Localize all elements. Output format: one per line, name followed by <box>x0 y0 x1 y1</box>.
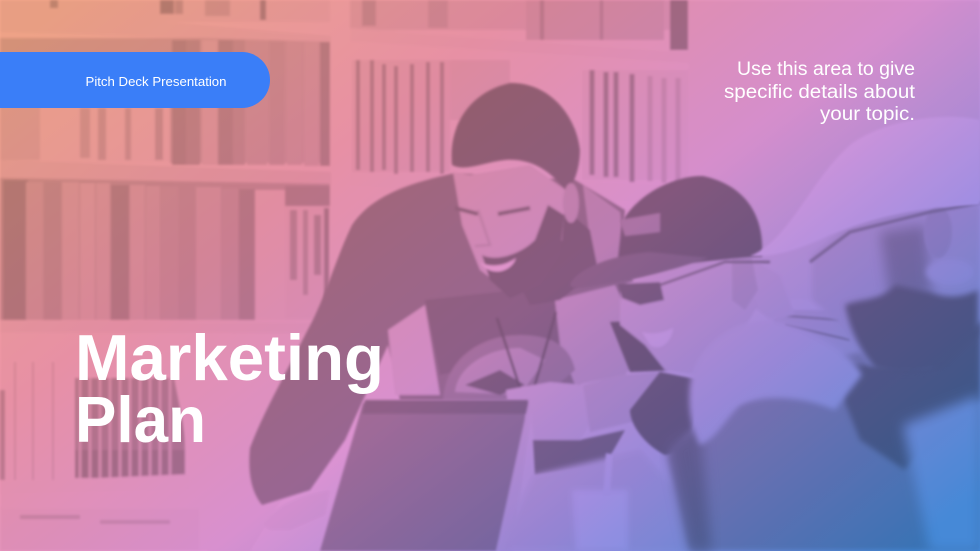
cap crown <box>618 176 762 268</box>
title: Marketing Plan: Marketing <box>75 321 384 394</box>
eyes and brow <box>455 208 530 214</box>
face <box>812 205 980 365</box>
sunglasses <box>618 282 664 305</box>
grey right of shirt <box>555 285 645 385</box>
ear <box>732 258 758 310</box>
hood <box>583 185 625 275</box>
table <box>500 450 690 551</box>
pill label: Pitch Deck Presentation <box>0 52 270 108</box>
person: man in dark cap <box>570 176 865 455</box>
glasses <box>810 203 980 262</box>
upper left shelf row <box>0 38 330 166</box>
cap logo <box>620 213 660 236</box>
hand on laptop <box>262 490 330 530</box>
left laptop screen <box>172 368 266 551</box>
straw <box>603 453 613 495</box>
title: Marketing Plan <box>75 321 384 456</box>
neck light patch <box>926 259 974 285</box>
white cap <box>750 117 980 256</box>
binder row <box>0 178 330 320</box>
hair <box>452 83 580 190</box>
sideburn <box>880 225 932 300</box>
table and cup <box>500 450 690 551</box>
pill label: Pitch Deck Presentation: Pitch Deck Presentation <box>86 74 226 89</box>
person: man in white cap <box>668 117 980 551</box>
lower left shelf row <box>0 345 190 480</box>
beard <box>845 285 978 372</box>
forearm hand <box>506 382 595 445</box>
bottom left papers <box>0 508 200 551</box>
shelf boards <box>0 8 332 42</box>
description text: specific details about <box>724 82 916 103</box>
jacket <box>668 320 980 551</box>
title: Marketing Plan: Plan <box>75 383 206 456</box>
cap brim <box>570 252 708 288</box>
description text: Use this area to give <box>737 59 915 80</box>
cup <box>572 490 628 551</box>
face <box>453 165 566 293</box>
top left book row <box>0 0 330 22</box>
ear <box>924 206 952 258</box>
shirt emblem <box>443 335 575 400</box>
description text <box>724 59 916 125</box>
light jacket panel <box>903 395 980 551</box>
dark shirt <box>610 320 680 372</box>
shirt panel <box>388 305 440 395</box>
right bookcase <box>350 0 980 300</box>
striped shoulder <box>770 310 865 395</box>
white paper behind laptop <box>250 405 362 551</box>
open mouth <box>642 328 673 347</box>
smile <box>480 258 516 272</box>
light hair <box>745 255 795 320</box>
person: man in hoodie <box>249 83 662 530</box>
ear <box>563 183 579 223</box>
face <box>620 262 758 375</box>
jeans <box>533 430 625 475</box>
description text: your topic. <box>820 104 915 125</box>
beard <box>482 205 564 298</box>
hoodie body and arm <box>249 173 640 505</box>
dark collar <box>830 320 980 470</box>
jacket shadow <box>668 425 712 551</box>
clasped hands <box>689 320 862 445</box>
dark laptop <box>320 400 533 551</box>
dark torso <box>425 285 575 375</box>
hoodie drawstrings <box>497 312 556 388</box>
sleeve cuff <box>583 372 662 432</box>
